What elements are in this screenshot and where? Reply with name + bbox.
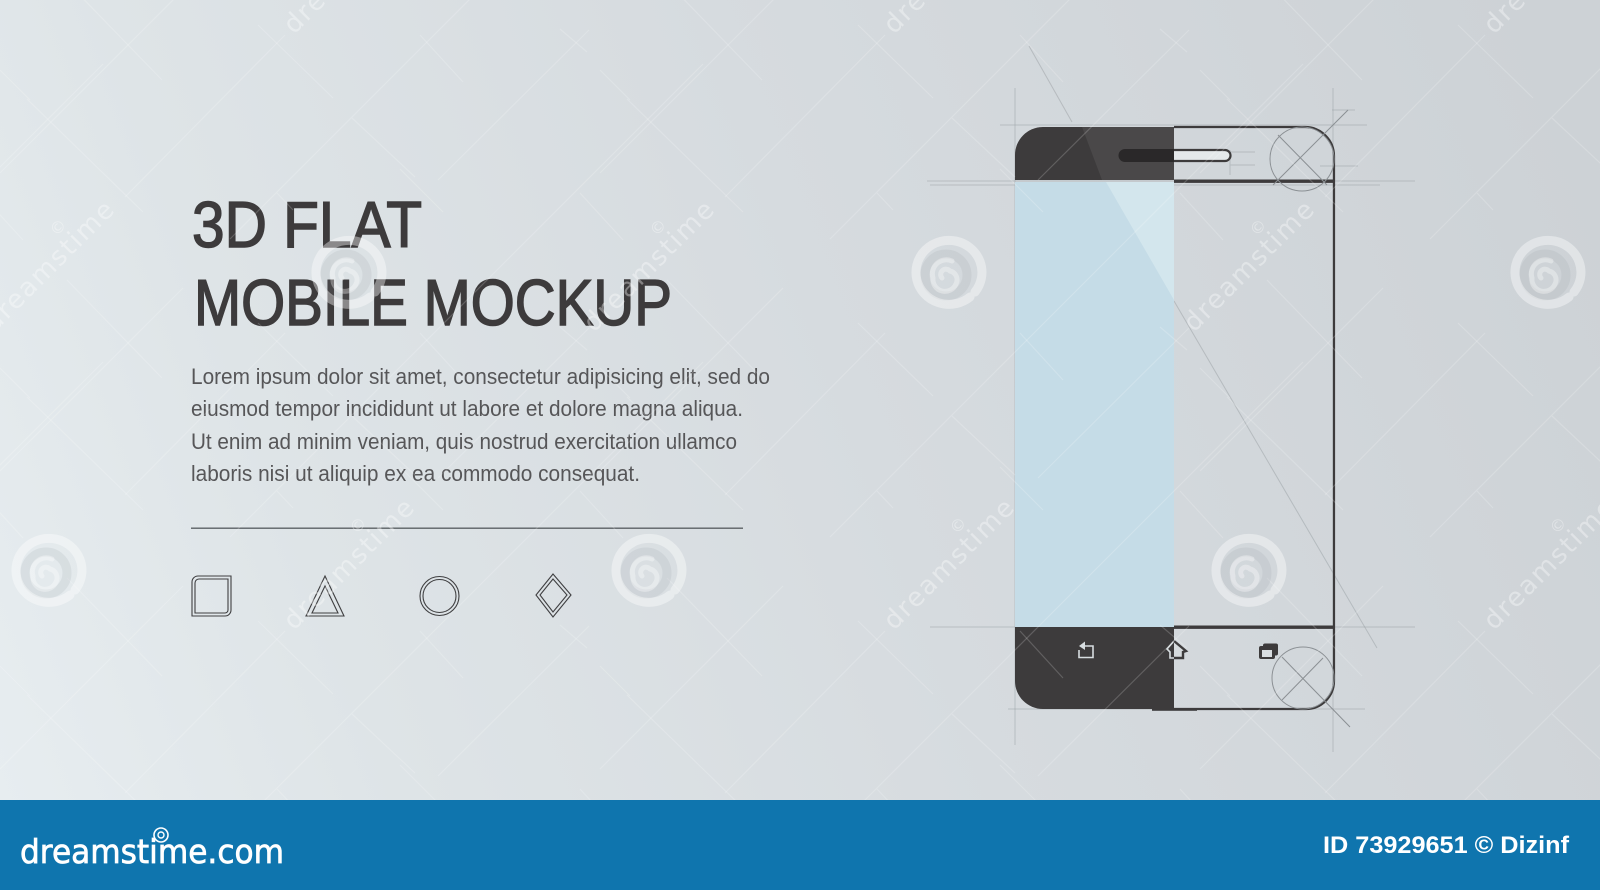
watermark pattern overlay: dreamstime [1178, 195, 1321, 338]
watermark pattern overlay: © [1546, 513, 1570, 538]
phone wireframe mockup [927, 46, 1415, 752]
bottom bezel dark half [1015, 627, 1174, 709]
screen reflection [1106, 182, 1174, 300]
corner guide circle top [1270, 110, 1348, 191]
heading: 3D flat mobile mockup: MOBILE MOCKUP [194, 266, 672, 339]
icon: diamond [536, 574, 571, 617]
watermark pattern overlay: © [1246, 215, 1270, 240]
watermark pattern overlay: © [346, 513, 370, 538]
icon: home button [1167, 641, 1186, 658]
heading: 3D flat mobile mockup [192, 188, 672, 339]
divider line [191, 528, 743, 529]
heading: 3D flat mobile mockup: 3D FLAT [192, 188, 422, 261]
footer bar [0, 800, 1600, 890]
shape icons row [192, 574, 571, 617]
watermark pattern overlay: © [646, 215, 670, 240]
top bezel dark half [1015, 127, 1174, 180]
construction guide lines [927, 46, 1415, 752]
body text block: Lorem ipsum dolor sit amet, consectetur adipisicing elit, sed do [191, 364, 770, 389]
body text block: laboris nisi ut aliquip ex ea commodo consequat. [191, 461, 640, 486]
watermark pattern overlay: © [946, 513, 970, 538]
body text block: eiusmod tempor incididunt ut labore et dolore magna aliqua. [191, 396, 743, 421]
watermark pattern overlay: dreamstime [878, 493, 1021, 636]
icon: circle [420, 576, 459, 616]
watermark pattern overlay: dreamstime [278, 493, 421, 636]
body text block [191, 364, 770, 486]
phone outline right half [1174, 127, 1334, 709]
icon: logo spiral [154, 828, 168, 842]
top bezel highlight [1082, 127, 1174, 180]
corner guide circle bottom [1272, 647, 1350, 727]
icon: triangle [306, 576, 344, 616]
screen: blue half [1015, 182, 1174, 627]
watermark pattern overlay: © [46, 215, 70, 240]
speaker [1119, 149, 1230, 162]
dreamstime logo text: dreamstime.com [20, 832, 284, 871]
image id and author: ID 73929651 © Dizinf [1323, 832, 1570, 859]
watermark pattern overlay: dreamstime [578, 195, 721, 338]
body text block: Ut enim ad minim veniam, quis nostrud exercitation ullamco [191, 429, 737, 454]
icon: tabs button [1259, 644, 1278, 659]
icon: square [192, 576, 231, 616]
bottom notch [1152, 709, 1197, 711]
top divider [1174, 180, 1334, 183]
icon: back button [1079, 642, 1093, 658]
bottom divider [1174, 626, 1334, 629]
